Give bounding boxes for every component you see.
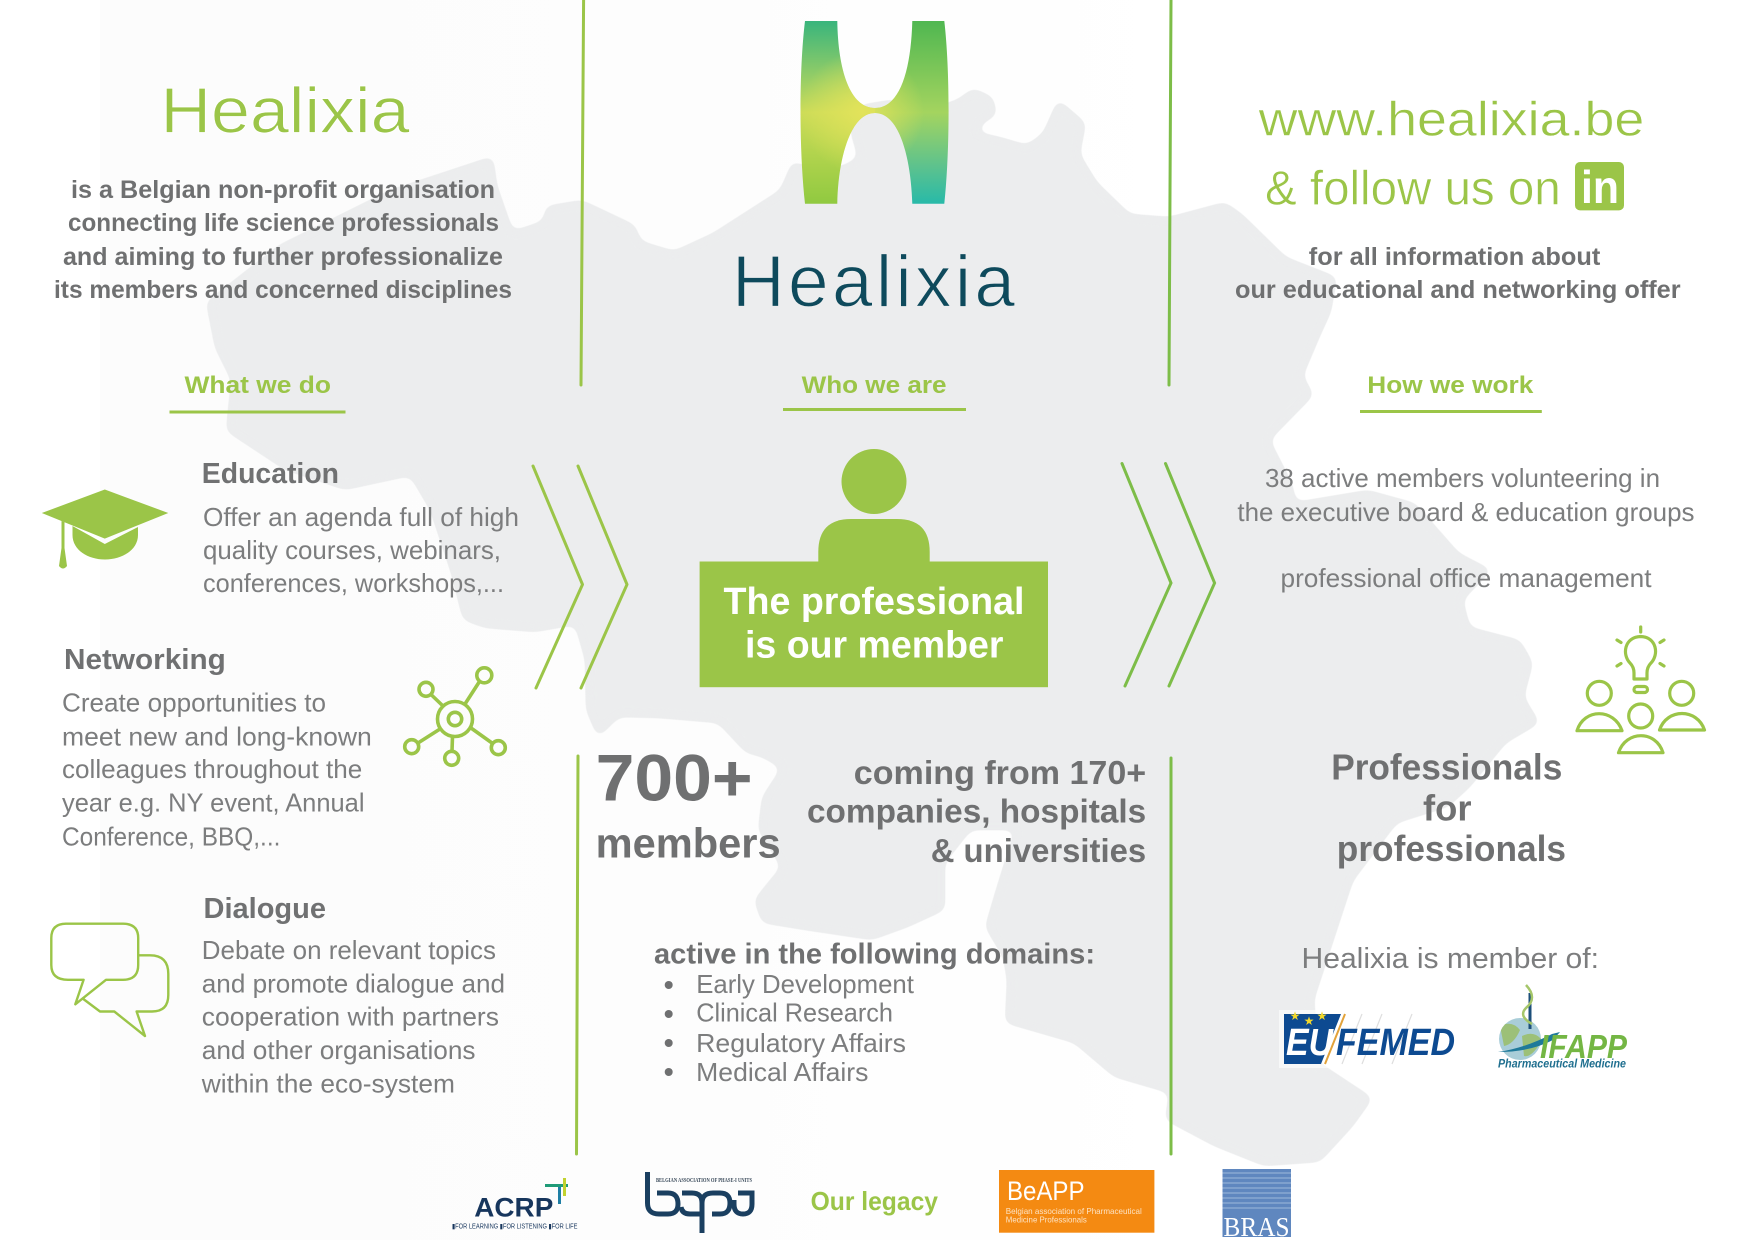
text: how we work [1237, 463, 1694, 593]
list: domains: active in the following domains: [654, 938, 1095, 970]
callout: professional member: is our member [745, 625, 1004, 667]
logo: EUFEMED: EU [1286, 1022, 1334, 1064]
callout: professional member [700, 562, 1048, 687]
heading: Who we are: Who we are [802, 372, 946, 399]
text: Networking: Create opportunities to [62, 688, 326, 718]
logo: BeAPP: Belgian association of Pharmaceutical [1006, 1206, 1142, 1216]
text: how we work: the executive board & education groups [1237, 497, 1694, 527]
text: Professionals for professionals: professionals [1337, 828, 1566, 869]
text: Education: Offer an agenda full of high [203, 502, 519, 532]
text: Networking: year e.g. NY event, Annual [62, 787, 364, 817]
heading: How we work: How we work [1367, 372, 1534, 399]
text: Dialogue: within the eco-system [201, 1068, 455, 1098]
text: how we work: 38 active members volunteering in [1265, 463, 1660, 493]
text: Networking: Conference, BBQ,... [62, 821, 280, 851]
heading: Who we are [783, 372, 966, 411]
text: Professionals for professionals: Professionals [1331, 746, 1562, 788]
text: Dialogue [201, 893, 505, 1098]
panel: Education [42, 458, 519, 598]
text: coming from [807, 754, 1146, 869]
text: Dialogue: and promote dialogue and [202, 968, 505, 998]
intro text: is a Belgian non-profit organisation [71, 176, 495, 204]
text: Networking: meet new and long-known [62, 721, 372, 751]
text: coming from: coming from 170+ [854, 754, 1146, 791]
intro text [54, 176, 512, 304]
text: Dialogue: cooperation with partners [202, 1001, 499, 1031]
follow us: & follow us on [1265, 162, 1561, 216]
text: Dialogue: Debate on relevant topics [202, 935, 496, 965]
icon: team with light bulb [1577, 627, 1704, 753]
text: Professionals for professionals [1331, 746, 1566, 869]
icon: speech bubbles [51, 924, 168, 1036]
logo: ACRP: ACRP [474, 1192, 553, 1222]
icon: person [818, 449, 930, 562]
logo: BeAPP: BeAPP [1007, 1176, 1084, 1206]
text: Education: conferences, workshops,... [203, 568, 504, 598]
logo wordmark: Healixia [732, 242, 1015, 322]
logo: ACRP [452, 1178, 578, 1231]
list: domains: Regulatory Affairs [696, 1028, 906, 1058]
text: coming from: companies, hospitals [807, 792, 1146, 830]
panel: member [700, 449, 1048, 687]
panel: Networking [62, 644, 505, 851]
icon: LinkedIn: in [1581, 161, 1619, 213]
logo: BAPU: BELGIAN ASSOCIATION OF PHASE-I UNITS [656, 1178, 753, 1184]
website: www.healixia.be [1257, 93, 1644, 146]
logo: BeAPP: Medicine Professionals [1006, 1215, 1087, 1225]
text: Networking [62, 644, 372, 851]
arrow: left chevrons [533, 466, 627, 688]
logo: EUFEMED: ★ [1290, 1009, 1300, 1023]
text: Education: quality courses, webinars, [203, 535, 501, 565]
list: domains: Clinical Research [696, 998, 893, 1028]
stat: 700+ members: members [596, 820, 781, 866]
logo: BAPU [648, 1172, 753, 1233]
text: Networking: Networking [64, 644, 226, 676]
list: domains: Early Development [696, 969, 915, 999]
panel: web links [1235, 93, 1681, 304]
icon: network [405, 668, 505, 765]
intro text: and aiming to further professionalize [63, 243, 503, 271]
intro text: connecting life science professionals [68, 209, 499, 237]
heading: What we do [170, 372, 346, 414]
background map of Belgium [206, 88, 1540, 1166]
text: Dialogue: and other organisations [202, 1035, 476, 1065]
logo: EUFEMED: ★ [1317, 1009, 1327, 1023]
logo: IFAPP: IFAPP [1540, 1028, 1628, 1065]
text: Professionals for professionals: for [1423, 788, 1472, 828]
panel: intro [54, 74, 512, 304]
logo: BeAPP [999, 1170, 1154, 1233]
web description [1235, 243, 1681, 304]
heading: How we work [1360, 372, 1542, 413]
logo: IFAPP [1498, 985, 1628, 1070]
heading: What we do: What we do [184, 372, 331, 399]
intro text: its members and concerned disciplines [54, 276, 512, 304]
text: Our legacy: Our legacy [811, 1186, 938, 1216]
text: coming from: & universities [931, 832, 1146, 869]
logo: IFAPP: Pharmaceutical Medicine [1498, 1058, 1627, 1070]
stat: 700+ members: 700+ [596, 741, 753, 815]
logo: Healixia [732, 15, 1015, 322]
icon: H mark [800, 21, 949, 204]
text: how we work: professional office management [1280, 563, 1652, 593]
panel: Dialogue [51, 893, 505, 1098]
logo: BRAS [1222, 1169, 1291, 1240]
logo: EUFEMED: ★ [1304, 1014, 1314, 1028]
text: Networking: colleagues throughout the [62, 754, 362, 784]
text: Dialogue: Dialogue [204, 893, 326, 925]
text: Education: Education [202, 458, 339, 490]
web description: our educational and networking offer [1235, 276, 1681, 304]
icon: graduation cap [42, 490, 168, 568]
text: Education [202, 458, 519, 598]
web description: for all information about [1309, 243, 1601, 271]
text: member of: Healixia is member of: [1302, 943, 1599, 975]
callout: professional member: The professional [724, 581, 1024, 623]
stat: 700+ members [596, 741, 781, 866]
arrow: right chevrons [1122, 464, 1215, 686]
list: domains: Medical Affairs [696, 1057, 868, 1087]
list: domains [654, 938, 1095, 1087]
logo: EUFEMED [1279, 1009, 1459, 1068]
logo: ACRP: ▮FOR LEARNING ▮FOR LISTENING ▮FOR LIFE [452, 1224, 578, 1231]
logo: EUFEMED: FEMED [1336, 1022, 1455, 1064]
title: Healixia: Healixia [160, 74, 410, 146]
